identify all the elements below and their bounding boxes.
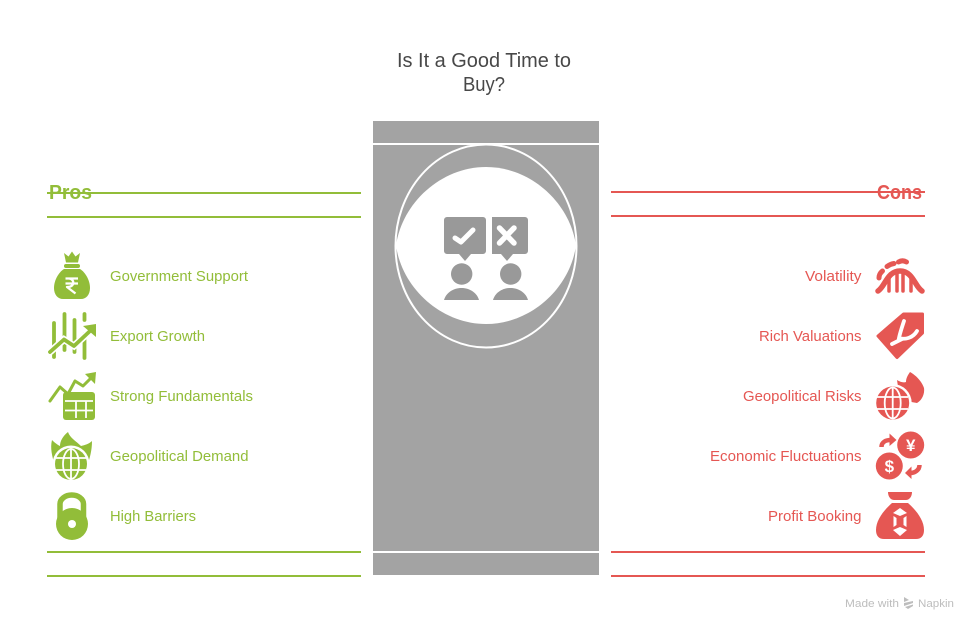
item: profit booking xyxy=(768,492,924,539)
panel: cons xyxy=(611,182,925,577)
icon: growth chart with arrow xyxy=(50,314,96,358)
item: geopolitical risks: Geopolitical Risks xyxy=(743,388,862,405)
item: geopolitical risks xyxy=(743,372,924,422)
item: high barriers: High Barriers xyxy=(110,508,196,525)
panel: pros xyxy=(47,182,361,577)
item: rich valuations xyxy=(759,314,922,358)
item: rich valuations: Rich Valuations xyxy=(759,328,862,345)
footer: made with napkin: Napkin xyxy=(918,598,954,610)
item: volatility: Volatility xyxy=(805,268,862,285)
icon: currency exchange: ¥ xyxy=(906,436,916,455)
item: government support: Government Support xyxy=(110,268,249,285)
title: Buy? xyxy=(463,74,505,96)
icon: globe with flame xyxy=(874,372,924,422)
item: geopolitical demand: Geopolitical Demand xyxy=(110,448,248,465)
item: high barriers xyxy=(56,495,196,540)
item: export growth: Export Growth xyxy=(110,328,205,345)
item: geopolitical demand xyxy=(51,432,248,482)
icon: two people voting yes and no xyxy=(444,217,528,300)
item: profit booking: Profit Booking xyxy=(768,508,862,525)
item: volatility xyxy=(805,261,922,291)
footer: made with napkin: Made with xyxy=(845,598,899,610)
footer: made with napkin xyxy=(845,597,954,610)
icon: money bag with rupee xyxy=(54,252,90,299)
icon: roller coaster xyxy=(878,261,922,291)
item: export growth xyxy=(50,314,205,358)
icon: currency exchange xyxy=(876,432,924,480)
title xyxy=(397,50,571,96)
heading: pros: Pros xyxy=(49,182,92,204)
icon: chart line over table xyxy=(50,372,96,420)
icon: padlock xyxy=(56,495,88,540)
item: strong fundamentals xyxy=(50,372,253,420)
heading: cons: Cons xyxy=(877,182,922,204)
item: economic fluctuations xyxy=(710,432,924,480)
icon: price tag xyxy=(878,314,922,358)
item: government support xyxy=(54,252,249,299)
title: Is It a Good Time to xyxy=(397,50,571,72)
item: strong fundamentals: Strong Fundamentals xyxy=(110,388,253,405)
icon: currency exchange: $ xyxy=(885,457,895,476)
icon: money bag with gem xyxy=(876,492,924,539)
panel: central column xyxy=(373,121,599,575)
icon: globe in flames xyxy=(51,432,92,482)
item: economic fluctuations: Economic Fluctuations xyxy=(710,448,862,465)
